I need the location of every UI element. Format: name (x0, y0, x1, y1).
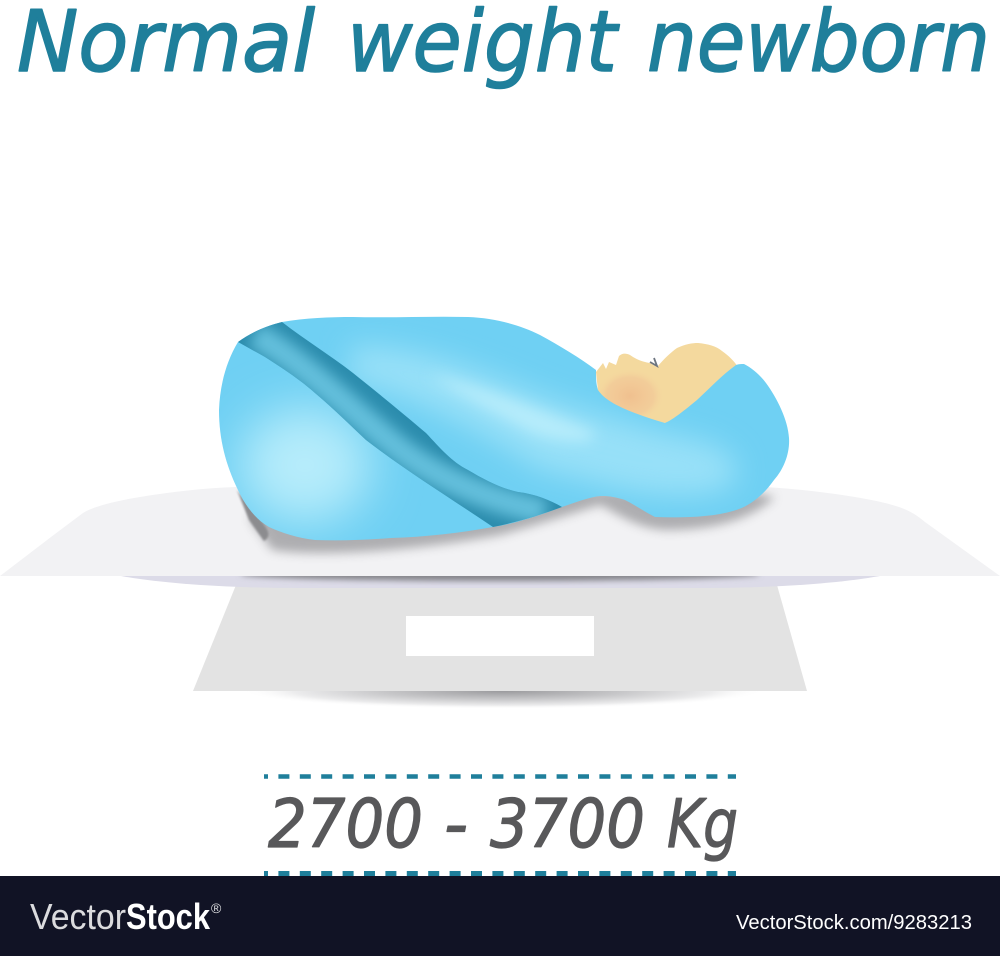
top dashed line (264, 774, 736, 779)
weight label: 2700 (268, 785, 423, 863)
weight label: Kg (667, 785, 738, 863)
weight label: 3700 (490, 785, 645, 863)
footer bar (0, 876, 1000, 956)
weight label (268, 785, 738, 863)
VectorStock logo: ® (211, 900, 222, 916)
weight range (264, 776, 738, 874)
weight label: - (444, 785, 468, 863)
VectorStock logo: Stock (126, 896, 211, 937)
closed eye (650, 358, 657, 366)
blanket highlights (239, 345, 738, 523)
image id: VectorStock.com/9283213 (736, 912, 972, 934)
face and head (596, 343, 738, 430)
title (17, 0, 990, 92)
VectorStock logo: Vector (30, 896, 126, 937)
platform top (0, 487, 1000, 576)
cheek (596, 369, 664, 423)
baby (210, 310, 800, 550)
VectorStock logo (30, 896, 222, 937)
weighing scale (0, 487, 1000, 709)
platform underside (122, 576, 879, 587)
baby shadow on platform (237, 490, 775, 553)
base shadow (276, 691, 730, 706)
bottom dashed line (264, 871, 736, 876)
scale base (193, 585, 807, 691)
scale display (406, 616, 594, 656)
blue sash (238, 322, 562, 527)
blanket (210, 310, 800, 550)
